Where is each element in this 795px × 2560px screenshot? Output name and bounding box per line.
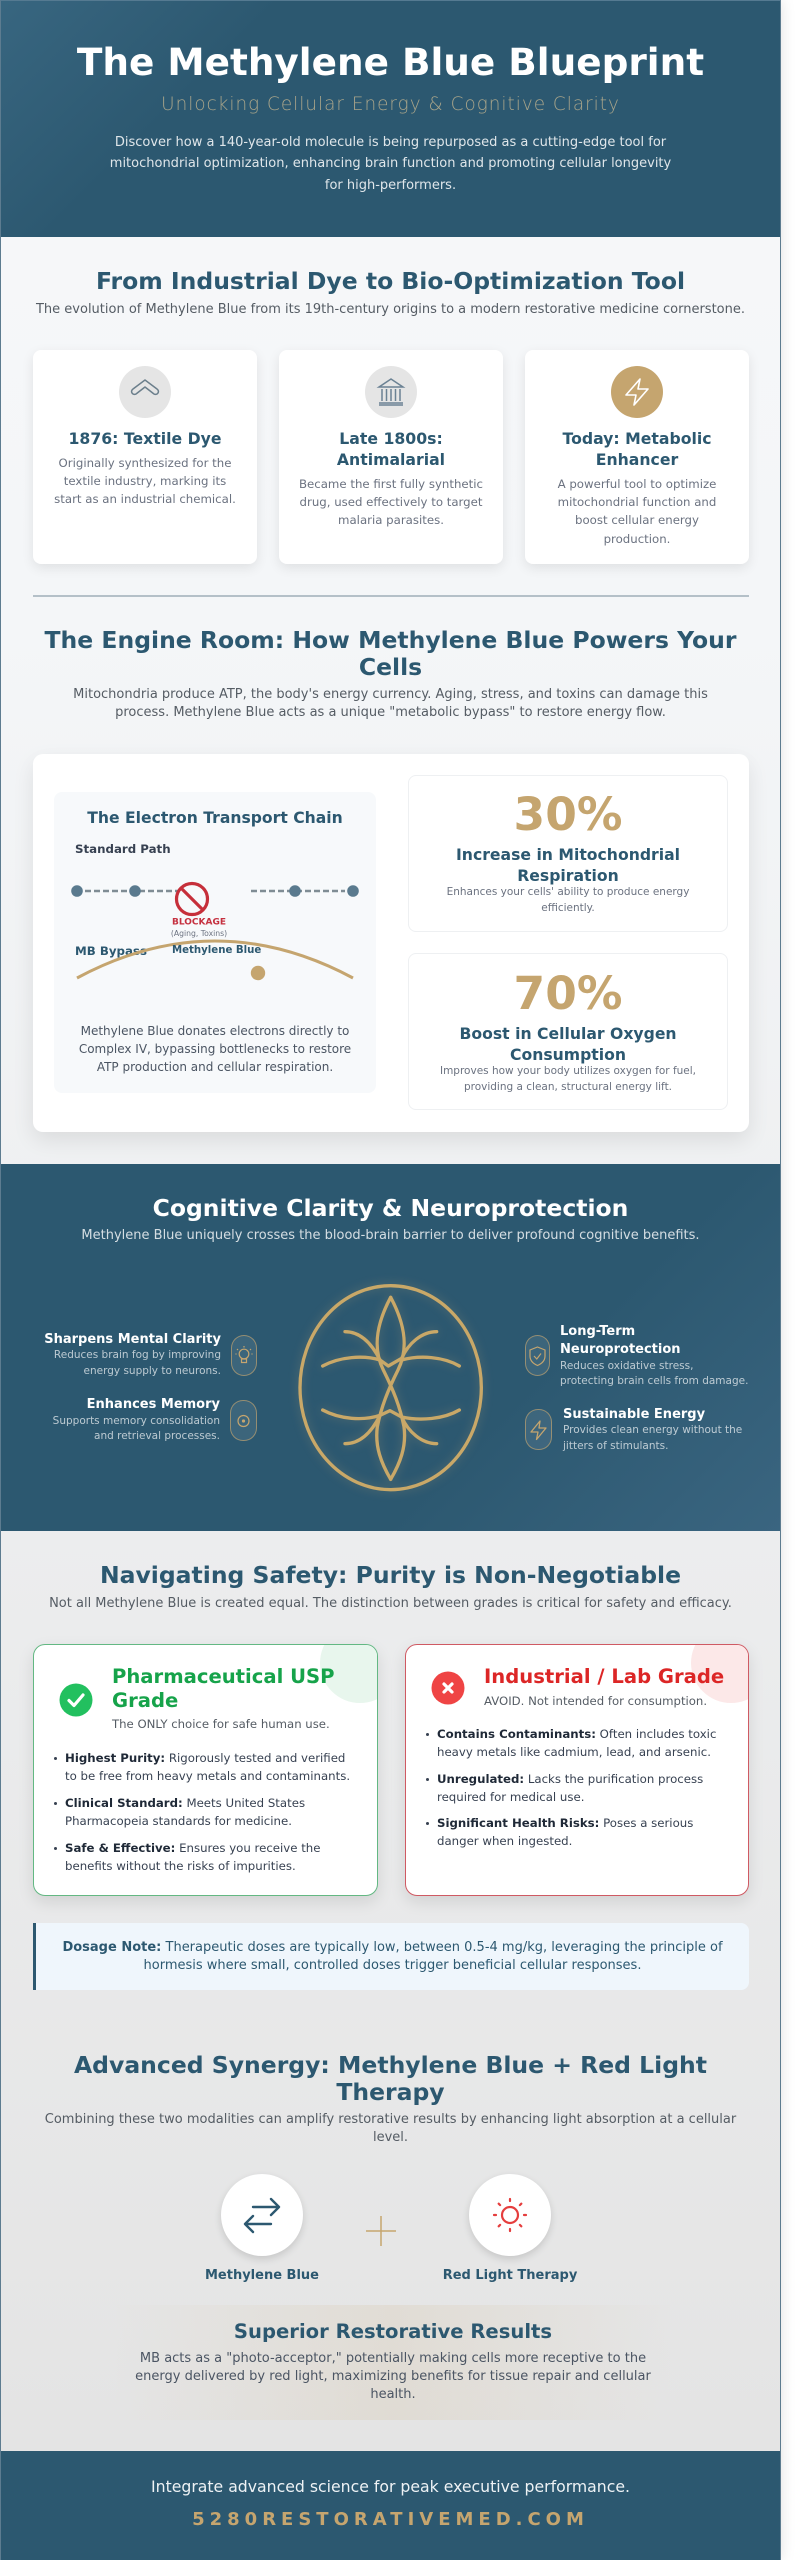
list: risks: danger when ingested. <box>437 1834 572 1848</box>
panel text: MB acts as a "photo-acceptor," potentially making cells more receptive to the <box>140 2351 646 2366</box>
heading: Cognitive Clarity & Neuroprotection <box>153 1194 628 1222</box>
diagram: electron transport: BLOCKAGE <box>172 918 226 928</box>
heading: synergy: Advanced Synergy: Methylene Blue + Red Light <box>74 2051 707 2079</box>
icon: cross <box>432 1672 464 1704</box>
list: benefits: Highest Purity: Rigorously tested and verified <box>65 1751 345 1765</box>
benefit text <box>562 1424 742 1452</box>
label: methylene blue: Methylene Blue <box>205 2268 319 2283</box>
corner accent <box>691 1623 771 1703</box>
list: risks: Contains Contaminants: Often includes toxic <box>437 1727 716 1741</box>
benefit text <box>54 1349 221 1377</box>
list: risks: required for medical use. <box>437 1790 584 1804</box>
footer website: 5280RESTORATIVEMED.COM <box>192 2509 589 2530</box>
footer tagline: Integrate advanced science for peak executive performance. <box>151 2477 630 2496</box>
diagram caption: ATP production and cellular respiration. <box>97 1060 333 1074</box>
benefit text: Provides clean energy without the <box>563 1424 742 1436</box>
card text: textile industry, marking its <box>64 474 226 488</box>
benefit text: Reduces oxidative stress, <box>560 1360 693 1372</box>
stat text: providing a clean, structural energy lift. <box>464 1081 672 1093</box>
header band <box>0 0 781 237</box>
callout: dosage note <box>33 1923 749 1990</box>
callout: dosage note: Dosage Note: Therapeutic doses are typically low, between 0.5-4 mg/kg, leveraging the principle of <box>62 1940 723 1954</box>
heading: origins: From Industrial Dye to Bio-Optimization Tool <box>96 267 685 295</box>
diagram: electron transport: (Aging, Toxins) <box>171 929 227 938</box>
benefit: sustainable energy <box>525 1407 742 1452</box>
icon: target <box>230 1400 257 1441</box>
card text: malaria parasites. <box>338 513 444 527</box>
synergy subtitle <box>45 2112 736 2145</box>
card: late 1800s antimalarial <box>279 350 503 564</box>
list: risks: Unregulated: Lacks the purification process <box>437 1772 703 1786</box>
benefit text <box>53 1414 220 1442</box>
label: standard path: Standard Path <box>75 842 171 856</box>
card: today metabolic enhancer <box>525 350 749 564</box>
benefit text: and retrieval processes. <box>94 1430 220 1442</box>
list: benefits: benefits without the risks of impurities. <box>65 1859 296 1873</box>
card text: drug, used effectively to target <box>300 495 482 509</box>
grade title: Grade <box>112 1689 178 1712</box>
benefit text <box>560 1360 748 1387</box>
card text: Originally synthesized for the <box>59 456 231 470</box>
benefit title: Enhances Memory <box>87 1397 220 1412</box>
engine room subtitle: Mitochondria produce ATP, the body's energy currency. Aging, stress, and toxins can damage this <box>73 687 708 702</box>
card text: A powerful tool to optimize <box>558 477 716 491</box>
icon: bolt <box>611 366 663 418</box>
stat text: Enhances your cells' ability to produce energy <box>447 886 689 898</box>
benefit text: Reduces brain fog by improving <box>54 1349 221 1361</box>
benefit text: energy supply to neurons. <box>84 1365 221 1377</box>
card: 1876 textile dye <box>33 350 257 564</box>
icon: bolt <box>525 1409 552 1450</box>
icon: chevron <box>119 366 171 418</box>
panel: industrial grade <box>405 1644 749 1896</box>
card text <box>54 456 236 506</box>
stat text <box>447 886 690 914</box>
label: MB bypass: MB Bypass <box>75 944 147 958</box>
diagram: electron transport <box>71 882 359 980</box>
benefit title: Long-Term <box>560 1324 635 1339</box>
diagram caption: Complex IV, bypassing bottlenecks to restore <box>79 1042 351 1056</box>
stat card: 70% <box>408 953 728 1110</box>
stat number: 30% <box>514 788 622 841</box>
card text <box>558 477 716 546</box>
engine room subtitle: process. Methylene Blue acts as a unique "metabolic bypass" to restore energy flow. <box>115 705 666 720</box>
icon: methylene blue <box>221 2174 303 2256</box>
benefit text: Supports memory consolidation <box>53 1414 220 1426</box>
card title: Today: Metabolic <box>562 429 712 448</box>
panel: pharmaceutical grade <box>33 1644 378 1896</box>
icon: shield <box>525 1335 550 1376</box>
card title: Late 1800s: <box>339 429 443 448</box>
stat card: 30% <box>408 775 728 932</box>
card title: Antimalarial <box>337 450 445 469</box>
panel text: health. <box>370 2387 416 2402</box>
intro paragraph: Discover how a 140-year-old molecule is being repurposed as a cutting-edge tool for <box>115 135 666 150</box>
intro paragraph: mitochondrial optimization, enhancing brain function and promoting cellular longevity <box>110 156 671 171</box>
icon: red light <box>469 2174 551 2256</box>
grade subtitle: AVOID. Not intended for consumption. <box>484 1694 707 1708</box>
benefit: neuroprotection <box>525 1324 748 1387</box>
benefit title: Neuroprotection <box>560 1342 681 1357</box>
origins subtitle: The evolution of Methylene Blue from its 19th-century origins to a modern restorative medicine cornerstone. <box>36 302 745 317</box>
stat label <box>456 845 680 885</box>
heading: synergy <box>74 2051 707 2106</box>
heading: engine room: The Engine Room: How Methylene Blue Powers Your <box>45 626 736 654</box>
card text: production. <box>604 532 670 546</box>
synergy subtitle: Combining these two modalities can amplify restorative results by enhancing light absorption at a cellular <box>45 2112 736 2127</box>
engine room subtitle <box>73 687 708 720</box>
intro paragraph <box>110 135 671 193</box>
safety subtitle: Not all Methylene Blue is created equal. The distinction between grades is critical for safety and efficacy. <box>49 1596 732 1611</box>
icon: check <box>60 1684 92 1716</box>
list: risks: heavy metals like cadmium, lead, and arsenic. <box>437 1745 711 1759</box>
synergy subtitle: level. <box>373 2130 408 2145</box>
card text <box>299 477 483 527</box>
card text: boost cellular energy <box>575 513 699 527</box>
stat label: Increase in Mitochondrial <box>456 845 680 864</box>
card text: start as an industrial chemical. <box>54 492 236 506</box>
card title: 1876: Textile Dye <box>68 429 222 448</box>
benefit text: protecting brain cells from damage. <box>560 1375 748 1387</box>
label: red light therapy: Red Light Therapy <box>443 2268 577 2283</box>
list: benefits: Clinical Standard: Meets United States <box>65 1796 305 1810</box>
diagram caption <box>79 1024 351 1074</box>
heading: engine room <box>44 626 736 681</box>
heading: safety: Navigating Safety: Purity is Non-Negotiable <box>100 1561 681 1589</box>
card text: mitochondrial function and <box>558 495 716 509</box>
benefit title: Sustainable Energy <box>563 1407 705 1422</box>
diagram: electron transport: Methylene Blue <box>172 945 261 956</box>
panel: superior results <box>112 2305 674 2420</box>
subtitle: Unlocking Cellular Energy & Cognitive Clarity <box>161 94 620 115</box>
panel text <box>135 2351 651 2402</box>
title: The Methylene Blue Blueprint <box>77 40 704 84</box>
benefit title: Sharpens Mental Clarity <box>44 1332 221 1347</box>
intro paragraph: for high-performers. <box>325 178 456 193</box>
section: cognitive clarity <box>0 1164 781 1531</box>
grade subtitle: The ONLY choice for safe human use. <box>112 1717 330 1731</box>
stat text <box>440 1065 696 1093</box>
callout: dosage note: hormesis where small, controlled doses trigger beneficial cellular responses. <box>144 1958 641 1973</box>
card title <box>562 429 712 469</box>
benefit: mental clarity <box>44 1332 257 1377</box>
panel text: energy delivered by red light, maximizing benefits for tissue repair and cellular <box>135 2369 651 2384</box>
card text: Became the first fully synthetic <box>299 477 483 491</box>
icon: plus <box>366 2216 396 2246</box>
icon: lightbulb <box>231 1335 257 1376</box>
stat label <box>459 1024 677 1064</box>
stat label: Boost in Cellular Oxygen <box>459 1024 677 1043</box>
benefit title <box>560 1324 681 1357</box>
diagram caption: Methylene Blue donates electrons directly to <box>81 1024 349 1038</box>
grade title: Pharmaceutical USP <box>112 1665 335 1688</box>
icon: institution <box>365 366 417 418</box>
stat text: Improves how your body utilizes oxygen for fuel, <box>440 1065 696 1077</box>
panel title: The Electron Transport Chain <box>87 809 343 827</box>
stat text: efficiently. <box>541 902 595 914</box>
list: benefits: Safe & Effective: Ensures you receive the <box>65 1840 320 1854</box>
benefit text: jitters of stimulants. <box>563 1440 668 1452</box>
list: risks: Significant Health Risks: Poses a serious <box>437 1816 693 1830</box>
panel: electron transport chain <box>54 792 376 1093</box>
list: risks <box>426 1727 716 1848</box>
icon: brain emblem <box>295 1281 486 1494</box>
stat label: Respiration <box>517 866 619 885</box>
corner accent <box>320 1623 400 1703</box>
subtitle: Methylene Blue uniquely crosses the blood-brain barrier to deliver profound cognitive benefits. <box>81 1228 700 1243</box>
grade title: Industrial / Lab Grade <box>484 1665 724 1688</box>
benefit: memory <box>53 1397 257 1442</box>
heading: engine room: Cells <box>359 653 422 681</box>
stat number: 70% <box>514 967 622 1020</box>
list: benefits <box>54 1751 350 1873</box>
panel title: Superior Restorative Results <box>234 2320 552 2343</box>
grade title <box>112 1665 335 1712</box>
card title: Enhancer <box>596 450 678 469</box>
footer <box>0 2451 781 2560</box>
heading: synergy: Therapy <box>336 2078 445 2106</box>
list: benefits: to be free from heavy metals and contaminants. <box>65 1769 350 1783</box>
stat label: Consumption <box>510 1045 626 1064</box>
panel: engine room <box>33 754 749 1132</box>
list: benefits: Pharmacopeia standards for medicine. <box>65 1814 292 1828</box>
card title <box>337 429 445 469</box>
